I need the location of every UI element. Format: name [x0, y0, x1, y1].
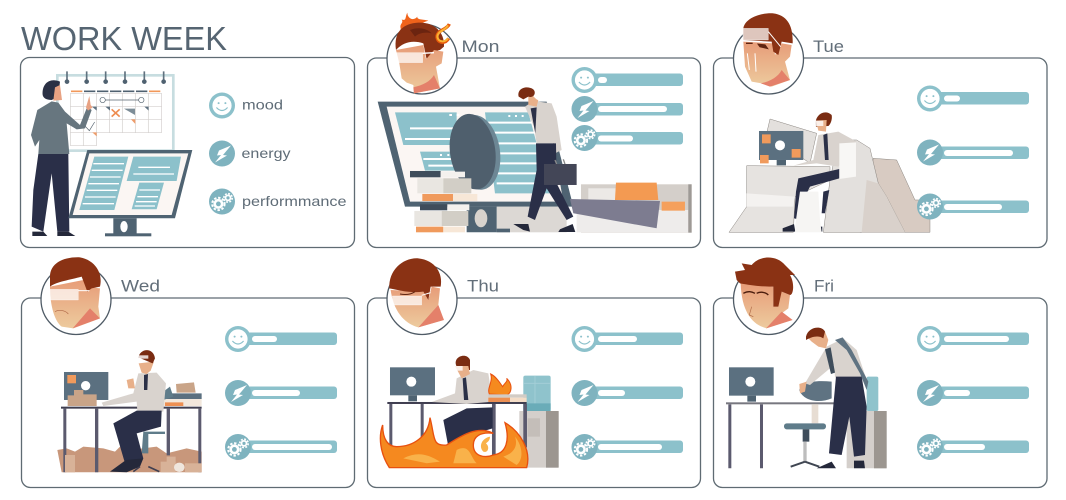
avatar: Friday relaxed head	[734, 257, 804, 334]
avatar: Wednesday glum head	[41, 257, 111, 334]
panel frame: Thursday	[368, 298, 700, 488]
panel: Thursday	[368, 258, 700, 488]
panel frame: Tuesday	[714, 58, 1047, 248]
panel frame: Wednesday	[22, 298, 354, 488]
illustration: man leaving desk with jacket over shoulder	[726, 328, 887, 468]
panel: legend	[20, 58, 354, 248]
legend: energy	[209, 140, 290, 166]
meter: mood	[917, 326, 1029, 352]
avatar: Thursday tired head	[387, 258, 457, 334]
avatar: Tuesday crying head	[734, 13, 804, 94]
meter: performance	[917, 194, 1029, 220]
title: WORK WEEK	[21, 20, 227, 57]
panel frame: Friday	[714, 298, 1047, 488]
meter: mood	[572, 67, 683, 93]
day label: Tue: Tue	[813, 37, 844, 56]
illustration: man at desk among boxes	[57, 350, 202, 472]
panel frame: Monday	[368, 58, 700, 248]
legend: energy: energy	[242, 145, 290, 161]
day label: Thu: Thu	[467, 276, 499, 296]
avatar: Monday angry head	[387, 13, 457, 94]
meter: energy	[225, 380, 337, 406]
legend: performance: performmance	[242, 193, 347, 209]
meter: mood	[572, 326, 683, 352]
meter: performance	[225, 434, 337, 460]
meter: energy	[917, 380, 1029, 406]
meter: mood	[225, 326, 337, 352]
meter: energy	[917, 140, 1029, 166]
day label: Mon: Mon	[462, 37, 500, 56]
panel: Friday	[714, 257, 1047, 488]
meter: performance	[917, 434, 1029, 460]
day label: Fri: Fri	[814, 276, 834, 296]
legend: performance	[209, 188, 347, 214]
panel: Monday	[368, 13, 700, 247]
illustration: man with calendar and monitor	[31, 71, 192, 236]
day label: Wed: Wed	[121, 276, 160, 296]
illustration: man at desk on paper mountains	[729, 112, 930, 232]
panel: Wednesday	[22, 257, 354, 488]
meter: energy	[572, 96, 683, 122]
meter: performance	[572, 434, 683, 460]
panel: Tuesday	[714, 13, 1047, 247]
meter: energy	[572, 380, 683, 406]
panel frame: legend	[20, 58, 354, 248]
illustration: man at desk with flames	[380, 356, 559, 468]
legend: mood: mood	[242, 96, 283, 112]
meter: performance	[572, 125, 683, 151]
meter: mood	[917, 86, 1029, 112]
legend: mood	[209, 92, 283, 118]
illustration: man walking away from monitor to bed	[378, 87, 692, 233]
